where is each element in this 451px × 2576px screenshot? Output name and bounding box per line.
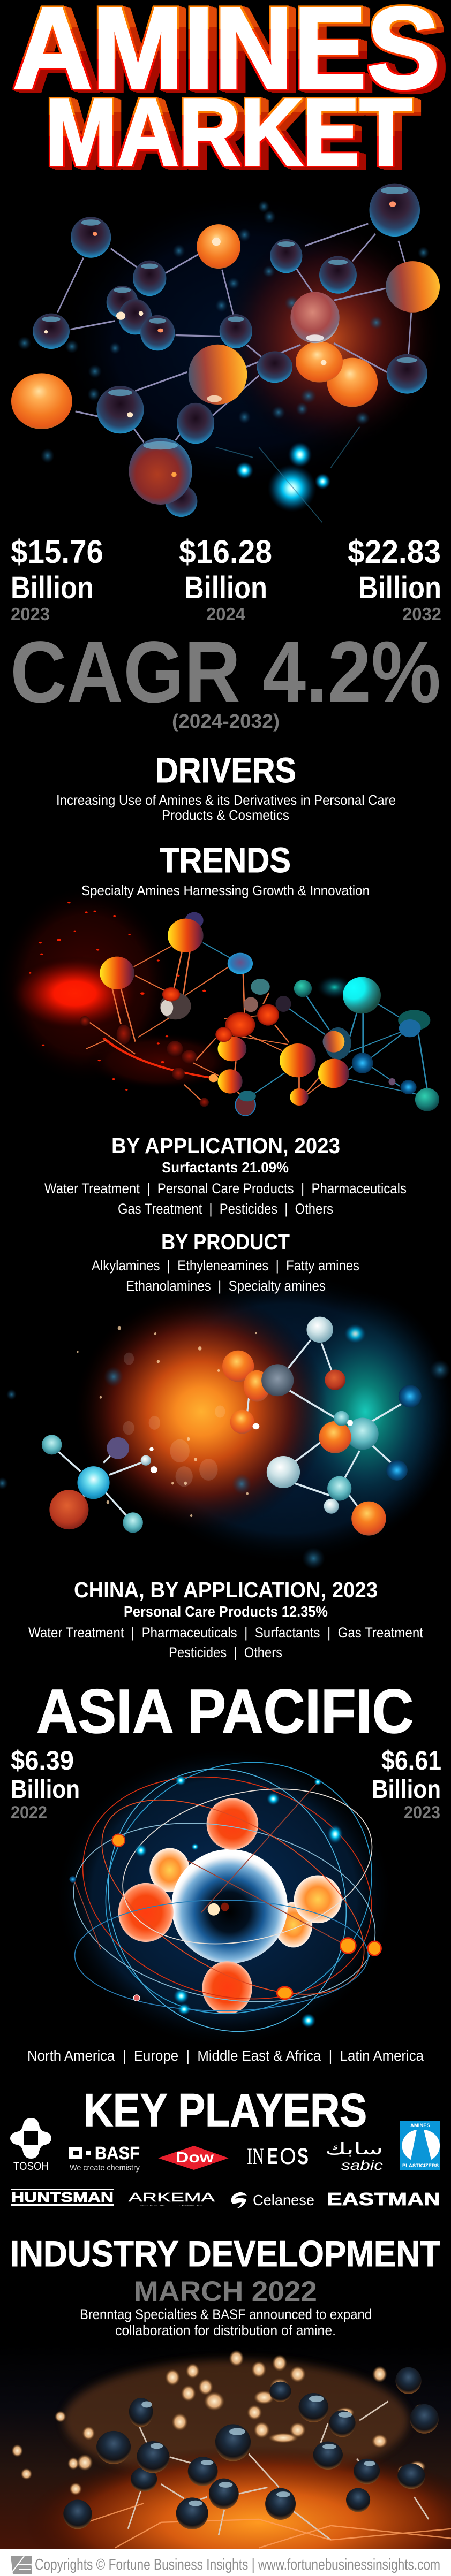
stat: 2024 value: 2024 bbox=[206, 604, 246, 624]
asia pacific heading: ASIA PACIFIC bbox=[36, 1676, 414, 1746]
stat: 2032 value bbox=[348, 534, 441, 624]
logo: Huntsman: HUNTSMAN bbox=[11, 2189, 114, 2205]
stat: asia pacific 2022: $6.39 bbox=[11, 1746, 74, 1775]
illustration: atom bbox=[55, 1719, 405, 2082]
industry development block bbox=[10, 2234, 440, 2338]
logo: SABIC: sabic bbox=[341, 2157, 383, 2173]
stat: 2023 value: $15.76 bbox=[11, 534, 103, 570]
orbit rings bbox=[60, 1719, 405, 2082]
by application block bbox=[44, 1133, 407, 1217]
logo: Amines Plasticizers: PLASTICIZERS bbox=[402, 2163, 439, 2169]
bonds bbox=[57, 1340, 401, 1516]
logo: Amines Plasticizers bbox=[400, 2121, 440, 2170]
specular highlights bbox=[44, 201, 396, 477]
stat: asia pacific 2023: Billion bbox=[372, 1775, 441, 1804]
logo: Celanese: Celanese bbox=[253, 2192, 314, 2208]
footer bbox=[0, 2549, 451, 2576]
stat: asia pacific 2022: Billion bbox=[11, 1775, 80, 1804]
stat: 2023 value: Billion bbox=[11, 570, 94, 605]
china by application block bbox=[28, 1577, 423, 1660]
logo: INEOS: S bbox=[297, 2144, 309, 2169]
logos bbox=[10, 2118, 440, 2209]
by product block: Alkylamines | Ethyleneamines | Fatty amines bbox=[92, 1257, 359, 1274]
sphere sheen bbox=[141, 2396, 375, 2506]
logo: Tosoh: TOSOH bbox=[13, 2160, 49, 2173]
CAGR figure: (2024-2032) bbox=[172, 710, 280, 732]
small nodes bbox=[69, 1775, 381, 2028]
china by application block: CHINA, BY APPLICATION, 2023 bbox=[74, 1577, 378, 1602]
stat: asia pacific 2023: $6.61 bbox=[381, 1746, 441, 1775]
industry development block: Brenntag Specialties & BASF announced to expand bbox=[80, 2306, 372, 2322]
bonds: warm bbox=[86, 946, 325, 1102]
trends block: Specialty Amines Harnessing Growth & Innovation bbox=[81, 882, 370, 898]
industry development block: MARCH 2022 bbox=[134, 2276, 317, 2307]
illustration: dark molecule network bbox=[0, 2344, 451, 2576]
atoms bbox=[11, 184, 440, 517]
other regions: North America | Europe | Middle East & Africa | Latin America bbox=[27, 2047, 424, 2064]
logo: BASF bbox=[69, 2143, 140, 2173]
drivers block: DRIVERS bbox=[155, 750, 296, 790]
logo: Arkema bbox=[129, 2190, 215, 2207]
logo: Arkema: ARKEMA bbox=[129, 2190, 215, 2204]
drivers block: Increasing Use of Amines & its Derivatives in Personal Care bbox=[56, 792, 396, 808]
logo: Dow bbox=[158, 2146, 229, 2170]
bonds: blue bbox=[203, 943, 427, 1094]
stat: asia pacific 2022 bbox=[11, 1746, 80, 1822]
atoms bbox=[80, 912, 439, 1116]
dark spheres bbox=[63, 2367, 439, 2529]
bonds bbox=[128, 2402, 429, 2540]
stat: asia pacific 2022: 2022 bbox=[11, 1803, 47, 1822]
china by application block: Pesticides | Others bbox=[169, 1644, 282, 1660]
stat: asia pacific 2023 bbox=[372, 1746, 441, 1822]
logo: Arkema: CHEMISTRY bbox=[179, 2204, 202, 2207]
stat: 2024 value: $16.28 bbox=[179, 534, 272, 570]
back orbs bbox=[149, 1848, 312, 1947]
by product block bbox=[92, 1230, 359, 1294]
by application block: Surfactants 21.09% bbox=[162, 1159, 289, 1176]
by product block: BY PRODUCT bbox=[161, 1230, 290, 1254]
by application block: Gas Treatment | Pesticides | Others bbox=[118, 1201, 333, 1217]
stat: 2032 value: 2032 bbox=[402, 604, 441, 624]
stat: 2023 value bbox=[11, 534, 103, 624]
by application block: BY APPLICATION, 2023 bbox=[111, 1133, 340, 1158]
stat: 2024 value bbox=[179, 534, 272, 624]
bonds bbox=[57, 224, 411, 442]
soft lights bbox=[11, 2350, 426, 2495]
china by application block: Personal Care Products 12.35% bbox=[124, 1603, 328, 1620]
logo: BASF: We create chemistry bbox=[70, 2163, 140, 2173]
logo: INEOS: E bbox=[267, 2144, 278, 2169]
atoms bbox=[42, 1317, 422, 1536]
illustration: red and teal molecule bbox=[0, 885, 439, 1116]
stat: 2024 value: Billion bbox=[184, 570, 267, 605]
trends block bbox=[81, 840, 370, 898]
trends block: TRENDS bbox=[160, 840, 291, 880]
drivers block bbox=[56, 750, 396, 823]
logo: Tosoh bbox=[10, 2118, 51, 2173]
central sphere bbox=[171, 1849, 288, 1963]
title bbox=[13, 0, 440, 185]
logo: Eastman: EASTMAN bbox=[327, 2189, 440, 2209]
cyan light burst bbox=[216, 427, 359, 522]
drivers block: Products & Cosmetics bbox=[162, 807, 289, 823]
stat: 2032 value: $22.83 bbox=[348, 534, 441, 570]
illustration: orange and teal molecules bbox=[0, 1271, 451, 1569]
stat: 2023 value: 2023 bbox=[11, 604, 50, 624]
by product block: Ethanolamines | Specialty amines bbox=[126, 1278, 326, 1294]
background haze bbox=[18, 191, 443, 492]
logo: INEOS: O bbox=[280, 2144, 296, 2169]
logo: Amines Plasticizers: AMINES bbox=[410, 2123, 430, 2129]
key players heading: KEY PLAYERS bbox=[84, 2085, 367, 2136]
logo: SABIC bbox=[325, 2140, 383, 2173]
logo: INEOS: IN bbox=[247, 2144, 264, 2169]
logo: Arkema: INNOVATIVE bbox=[140, 2204, 165, 2207]
footer logo bbox=[11, 2556, 32, 2574]
orange orbs bbox=[118, 1798, 342, 2014]
industry development block: collaboration for distribution of amine. bbox=[115, 2322, 336, 2338]
logo: Dow: Dow bbox=[176, 2149, 214, 2166]
stat: 2032 value: Billion bbox=[358, 570, 441, 605]
navy backdrop bbox=[55, 1747, 394, 2048]
logo: SABIC: سابك bbox=[325, 2140, 383, 2158]
title line: MARKET: MARKET bbox=[46, 79, 412, 185]
floor lines bbox=[86, 2503, 451, 2548]
red glow bbox=[0, 885, 236, 1091]
stat: asia pacific 2023: 2023 bbox=[404, 1803, 440, 1822]
illustration: hero molecule bbox=[11, 184, 443, 522]
glows bbox=[0, 1271, 451, 1569]
by application block: Water Treatment | Personal Care Products | Pharmaceuticals bbox=[44, 1180, 407, 1196]
logo: BASF: BASF bbox=[95, 2143, 140, 2163]
glass sheen on atoms bbox=[42, 187, 417, 449]
orange floor bbox=[0, 2344, 451, 2576]
